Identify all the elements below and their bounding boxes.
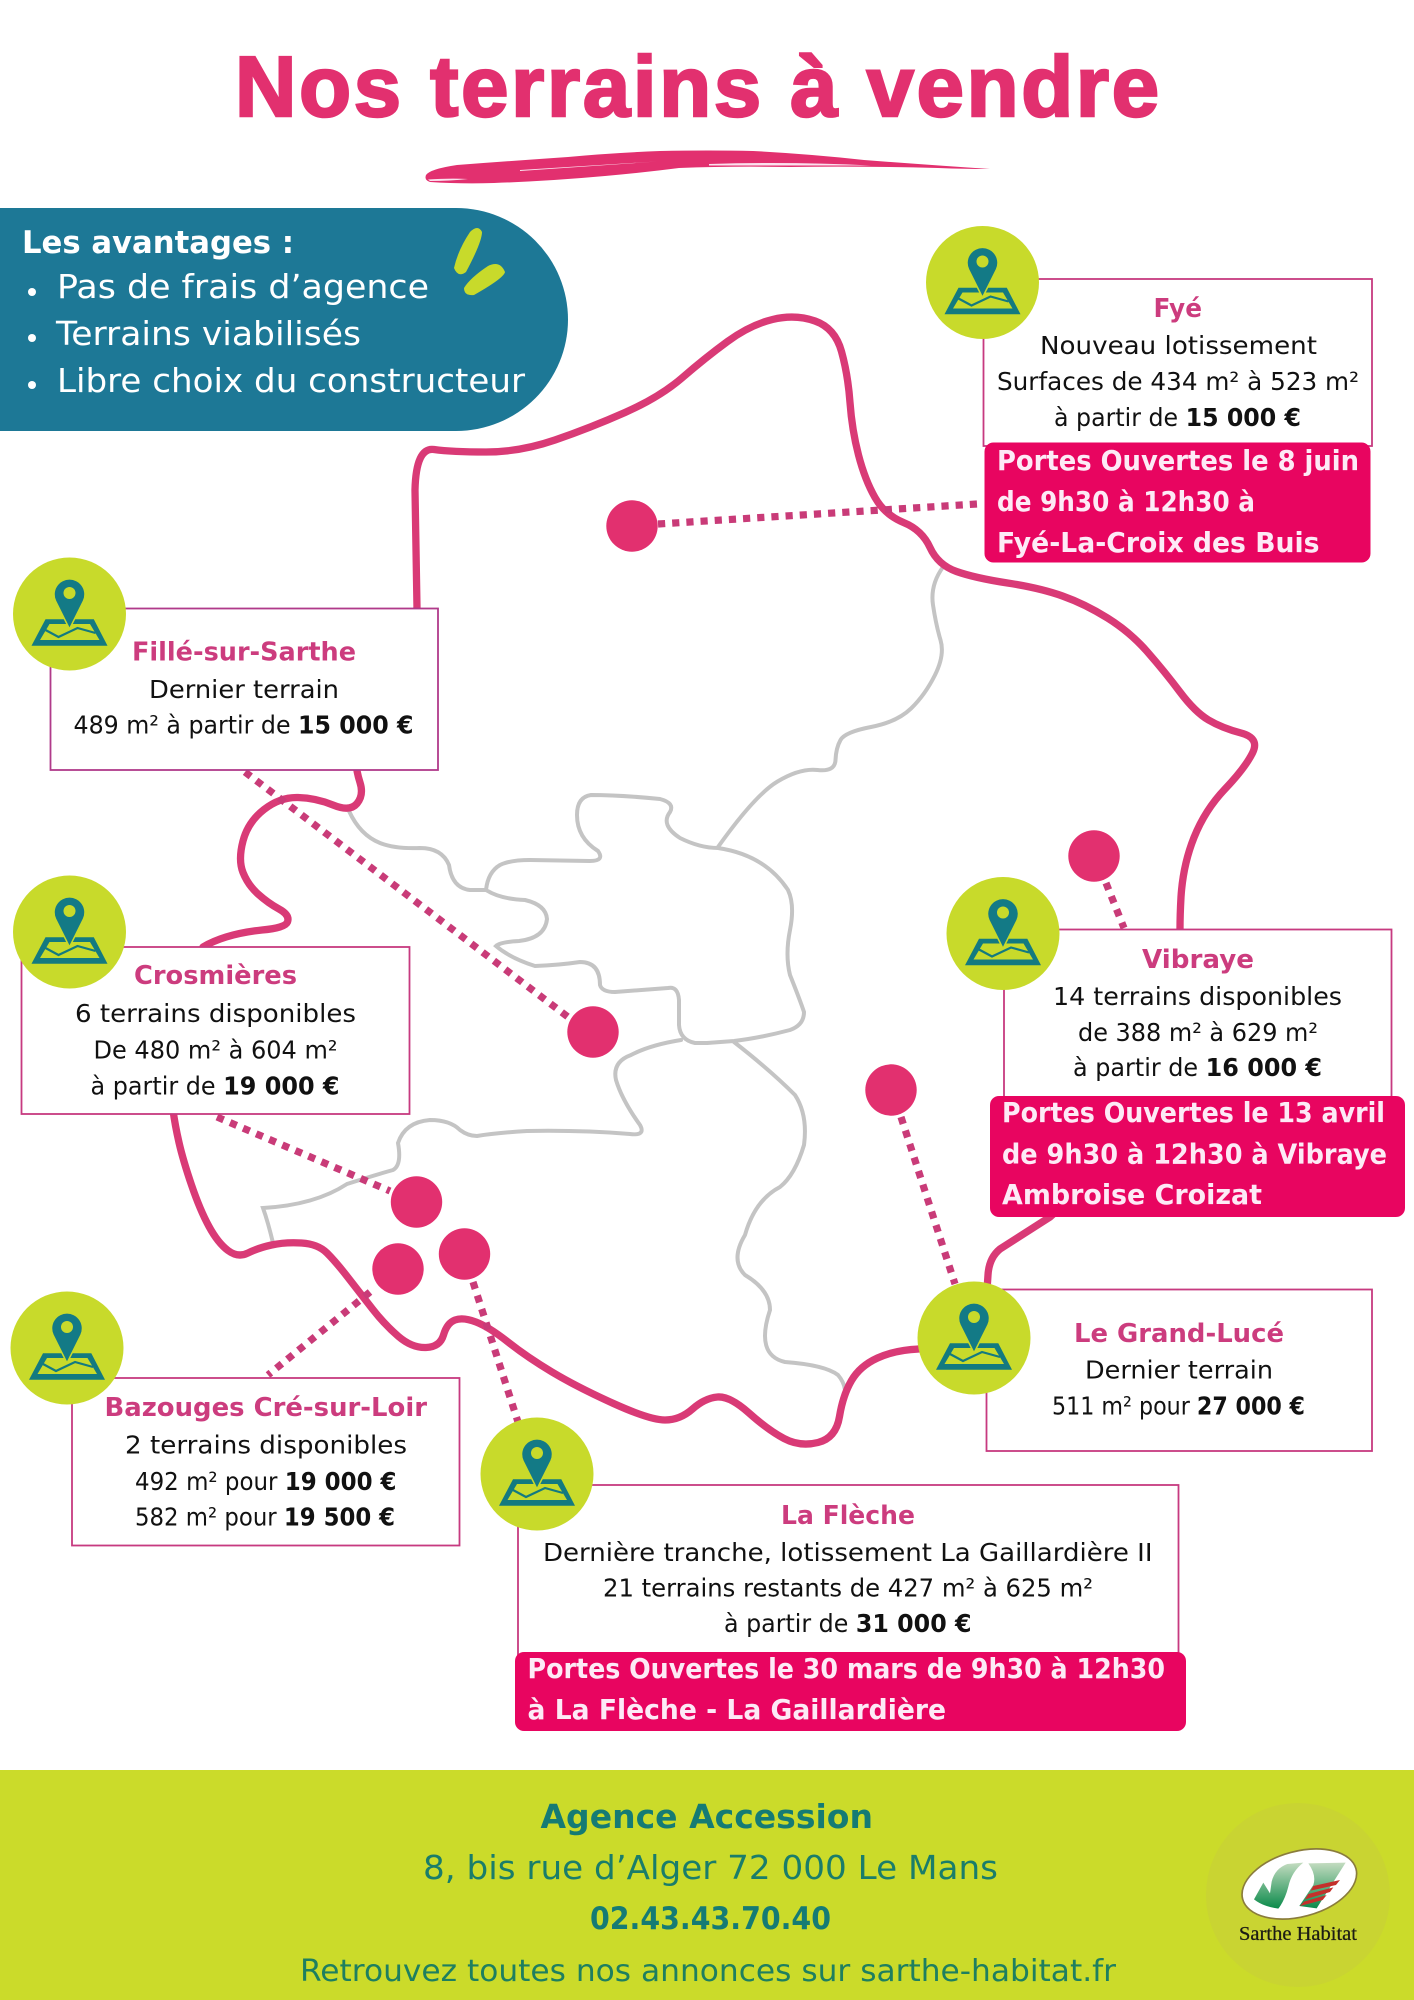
open house banner: Ambroise Croizat <box>1002 1178 1262 1211</box>
details: à partir de 19 000 € <box>90 1072 340 1100</box>
logo: Sarthe Habitat: Sarthe Habitat <box>1239 1923 1357 1945</box>
title brush underline <box>426 150 990 183</box>
icon: map pin <box>918 1282 1030 1394</box>
list of advantages <box>28 267 525 400</box>
title: Nos terrains à vendre <box>235 40 1159 135</box>
details <box>1052 1356 1305 1420</box>
details: Nouveau lotissement <box>1040 331 1317 360</box>
icon: map pin <box>926 226 1039 339</box>
open house banner <box>515 1652 1186 1731</box>
details: 489 m² à partir de 15 000 € <box>74 710 414 740</box>
agency name: Agence Accession <box>540 1797 873 1836</box>
map: department outline <box>173 317 1255 1444</box>
details: de 388 m² à 629 m² <box>1078 1018 1318 1047</box>
details <box>75 999 356 1100</box>
details: Dernier terrain <box>149 675 339 704</box>
open house banner: Fyé-La-Croix des Buis <box>997 526 1320 559</box>
details: De 480 m² à 604 m² <box>94 1036 338 1064</box>
details: à partir de 16 000 € <box>1073 1053 1322 1082</box>
details <box>1053 982 1342 1082</box>
phone: 02.43.43.70.40 <box>590 1901 831 1937</box>
name: La Flèche: La Flèche <box>781 1501 915 1531</box>
details: à partir de 31 000 € <box>724 1609 972 1638</box>
website line: Retrouvez toutes nos annonces sur sarthe-habitat.fr <box>300 1954 1117 1989</box>
details: Dernier terrain <box>1085 1356 1273 1384</box>
panel: Fyé <box>926 226 1372 562</box>
details <box>997 331 1359 432</box>
panel: Bazouges Cré-sur-Loir <box>10 1292 460 1546</box>
details <box>543 1538 1152 1638</box>
address: 8, bis rue d’Alger 72 000 Le Mans <box>423 1848 998 1887</box>
open house banner: de 9h30 à 12h30 à Vibraye <box>1002 1138 1387 1170</box>
details <box>125 1430 407 1532</box>
open house banner <box>990 1096 1405 1217</box>
details: Dernière tranche, lotissement La Gaillardière II <box>543 1538 1152 1567</box>
logo: Sarthe Habitat <box>1206 1803 1390 1987</box>
details: 6 terrains disponibles <box>75 999 356 1028</box>
open house banner: Portes Ouvertes le 8 juin <box>997 444 1359 477</box>
icon: map pin <box>13 558 126 670</box>
icon: accent strokes <box>454 228 505 295</box>
icon: map pin <box>480 1418 594 1530</box>
name: Le Grand-Lucé: Le Grand-Lucé <box>1074 1319 1284 1349</box>
name: Fillé-sur-Sarthe: Fillé-sur-Sarthe <box>132 638 356 668</box>
panel: Vibraye <box>946 877 1405 1217</box>
panel: Fillé-sur-Sarthe <box>13 558 438 770</box>
panel: Le Grand-Lucé <box>918 1282 1372 1451</box>
heading: les avantages: Les avantages : <box>22 225 294 261</box>
map: inner grey boundaries <box>263 567 943 1390</box>
name: Crosmières: Crosmières <box>134 961 297 991</box>
open house banner <box>984 442 1370 562</box>
details: Surfaces de 434 m² à 523 m² <box>997 367 1359 396</box>
list of advantages: Terrains viabilisés <box>55 314 361 353</box>
location dots on the map <box>372 500 1120 1295</box>
panel: Crosmières <box>13 876 410 1114</box>
details: 2 terrains disponibles <box>125 1430 407 1460</box>
panel: La Flèche <box>480 1418 1186 1731</box>
icon: map pin <box>946 877 1060 990</box>
details <box>74 675 414 740</box>
panel: advantages <box>0 208 568 431</box>
name: Fyé: Fyé <box>1154 294 1202 324</box>
dotted connector lines <box>217 504 1124 1422</box>
open house banner: Portes Ouvertes le 13 avril <box>1002 1096 1385 1129</box>
icon: map pin <box>13 876 126 988</box>
details: 582 m² pour 19 500 € <box>135 1502 395 1532</box>
open house banner: de 9h30 à 12h30 à <box>997 485 1255 518</box>
open house banner: à La Flèche - La Gaillardière <box>528 1693 946 1726</box>
list of advantages: Pas de frais d’agence <box>57 267 429 306</box>
details: 492 m² pour 19 000 € <box>135 1467 396 1496</box>
name: Bazouges Cré-sur-Loir: Bazouges Cré-sur-Loir <box>104 1393 427 1423</box>
icon: map pin <box>10 1292 124 1404</box>
open house banner: Portes Ouvertes le 30 mars de 9h30 à 12h30 <box>528 1652 1165 1685</box>
details: 21 terrains restants de 427 m² à 625 m² <box>603 1574 1093 1602</box>
panel: footer contact <box>0 1770 1414 2000</box>
details: 14 terrains disponibles <box>1053 982 1342 1011</box>
details: 511 m² pour 27 000 € <box>1052 1392 1305 1420</box>
list of advantages: Libre choix du constructeur <box>57 361 525 400</box>
details: à partir de 15 000 € <box>1054 403 1301 432</box>
name: Vibraye: Vibraye <box>1142 945 1254 975</box>
